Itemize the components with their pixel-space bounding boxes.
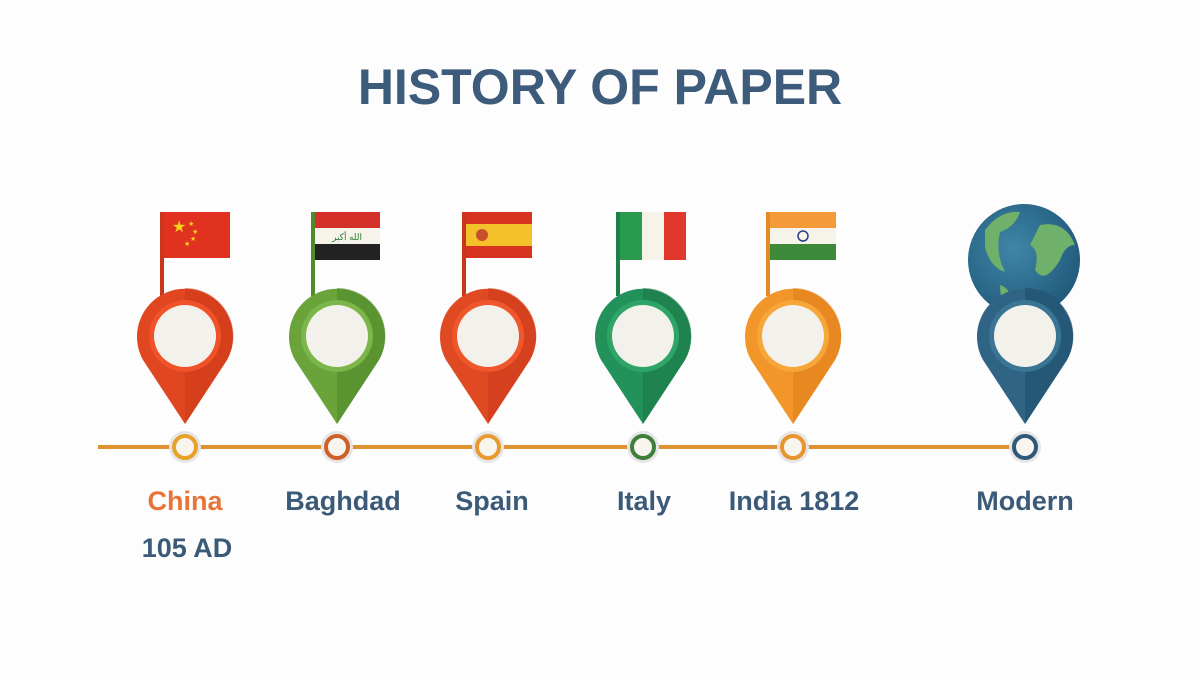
flag: China bbox=[160, 212, 230, 296]
label: China 105 AD bbox=[142, 486, 232, 563]
label: Modern: Modern bbox=[976, 486, 1074, 516]
flag: Italy bbox=[616, 212, 686, 296]
flag: China: ★ bbox=[190, 235, 196, 243]
icon: globe bbox=[968, 204, 1080, 316]
pin: China bbox=[137, 288, 233, 424]
label: Spain: Spain bbox=[455, 486, 529, 516]
title: HISTORY OF PAPER bbox=[358, 59, 842, 115]
pin: India bbox=[745, 288, 841, 424]
label: China 105 AD: China bbox=[147, 486, 223, 516]
pin: Baghdad bbox=[289, 288, 385, 424]
label: Italy: Italy bbox=[617, 486, 671, 516]
label: India 1812: India 1812 bbox=[729, 486, 859, 516]
flag: India bbox=[766, 212, 836, 296]
flag: China: ★ bbox=[188, 220, 194, 228]
timeline nodes bbox=[169, 431, 1041, 463]
label: Baghdad: Baghdad bbox=[285, 486, 401, 516]
flag: China: ★ bbox=[172, 219, 186, 236]
flag: Iraq: الله أكبر bbox=[331, 230, 362, 243]
flag: Iraq bbox=[311, 212, 380, 296]
pin: Spain bbox=[440, 288, 536, 424]
label: China 105 AD: 105 AD bbox=[142, 533, 232, 563]
flag: Spain bbox=[462, 212, 532, 296]
flag: China: ★ bbox=[192, 228, 198, 236]
pin: Italy bbox=[595, 288, 691, 424]
flag: China: ★ bbox=[184, 240, 190, 248]
timeline line bbox=[98, 445, 1015, 449]
pin: Modern bbox=[977, 288, 1073, 424]
